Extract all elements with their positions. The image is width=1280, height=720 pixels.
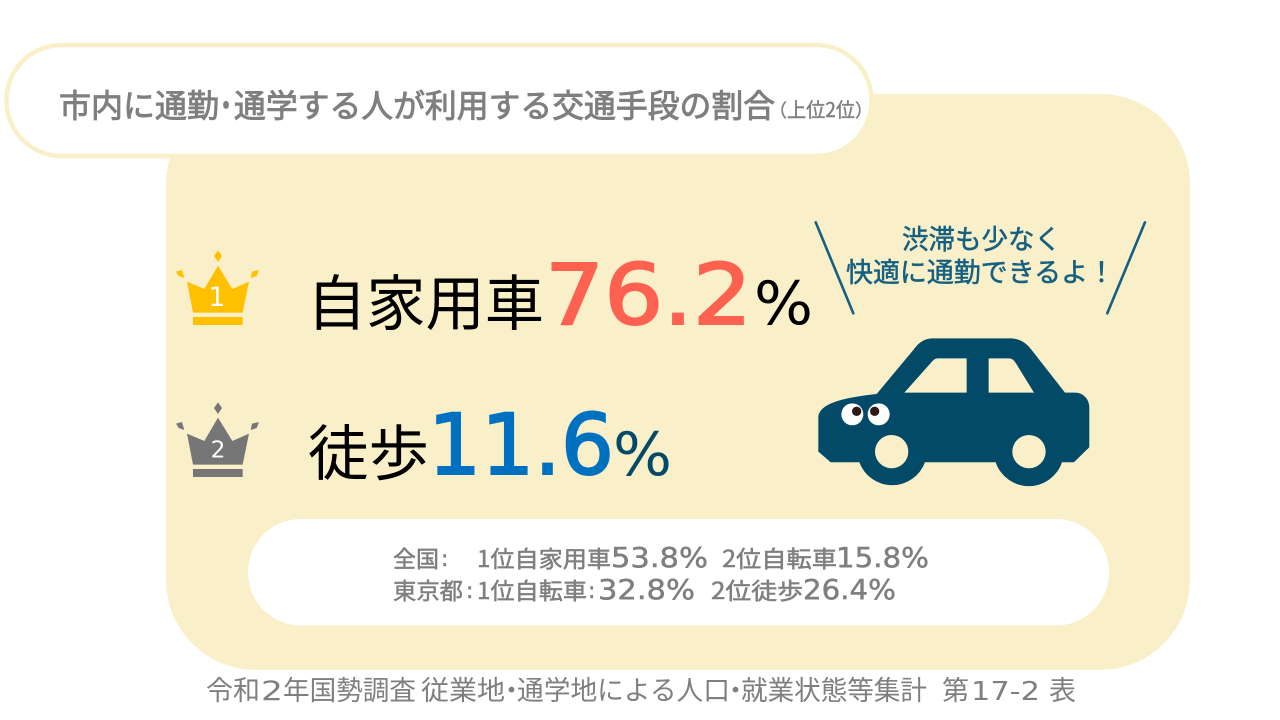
Tokyo figures: 東京都 — [393, 572, 463, 606]
source note: ・ — [498, 669, 525, 708]
Tokyo figures: : — [588, 579, 595, 604]
icon: car with eyes — [818, 338, 1089, 486]
source note — [206, 669, 1076, 708]
Tokyo figures: 26.4% — [803, 573, 896, 606]
national figures: 15.8% — [836, 541, 929, 574]
label: walking: 徒歩 — [308, 406, 429, 493]
icon: gray crown rank 2 — [176, 402, 259, 477]
heading note — [769, 94, 873, 123]
national figures: 2位自転車 — [722, 540, 837, 574]
source note: 令和 — [206, 669, 260, 708]
icon: gray crown rank 2: 2 — [211, 435, 225, 463]
speech callout — [816, 218, 1145, 313]
heading note: 上位2位 — [787, 94, 855, 123]
callout line 1: 渋滞も少なく — [902, 218, 1061, 257]
percent sign: % — [754, 269, 813, 339]
value: 76.2: 76.2 — [545, 246, 752, 344]
national figures — [393, 540, 929, 574]
Tokyo figures — [393, 572, 896, 606]
Tokyo figures: 32.8% — [598, 573, 695, 606]
icon: gold crown rank 1 — [176, 250, 259, 325]
source note: 2 — [261, 676, 283, 707]
Tokyo figures: 2位徒歩 — [711, 572, 803, 606]
Tokyo figures: 1位自転車 — [477, 572, 587, 606]
heading note: ） — [855, 97, 873, 123]
source note: 第 — [942, 669, 969, 708]
callout line 2: 快適に通勤できるよ！ — [846, 251, 1115, 290]
national figures: : — [441, 547, 448, 572]
source note: 表 — [1049, 669, 1076, 708]
national figures: 1位自家用車 — [477, 540, 611, 574]
value: 11.6: 11.6 — [428, 396, 614, 494]
label: private car: 自家用車 — [307, 256, 544, 343]
left emphasis line — [816, 222, 853, 313]
comparison pill — [248, 519, 1109, 626]
heading: 通学する人が利用する交通手段の割合 — [234, 81, 775, 127]
Tokyo figures: : — [466, 579, 473, 604]
percent sign: % — [613, 420, 672, 490]
panel: main background — [166, 94, 1190, 670]
rank 1 row — [307, 246, 813, 344]
national figures: 全国 — [393, 540, 439, 574]
heading note: （ — [769, 97, 787, 123]
source note: ・ — [722, 669, 749, 708]
national figures: 53.8% — [611, 541, 708, 574]
icon: gold crown rank 1: 1 — [209, 282, 225, 313]
rank 2 row — [308, 396, 672, 494]
source note: 従業地 — [421, 669, 505, 708]
heading: 市内に通勤 — [59, 81, 219, 127]
source note: 年国勢調査 — [283, 669, 416, 708]
heading: ・ — [214, 81, 238, 127]
title pill — [6, 45, 873, 156]
source note: 就業状態等集計 — [741, 669, 927, 708]
source note: 通学地による人口 — [517, 669, 730, 708]
source note: 17-2 — [971, 677, 1040, 707]
right emphasis line — [1107, 222, 1145, 313]
